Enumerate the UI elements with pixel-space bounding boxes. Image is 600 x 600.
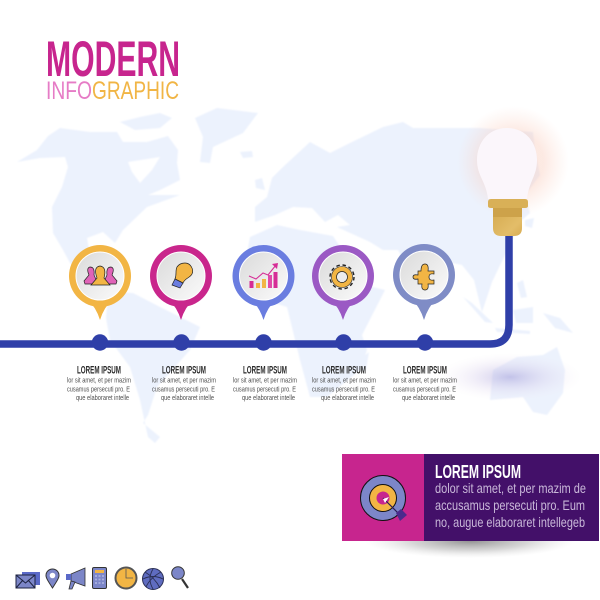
step 3 text: lor sit amet, et per mazim — [233, 376, 297, 384]
timeline dot 4 — [335, 334, 352, 351]
step 4 text: que elaboraret intelle — [321, 393, 374, 402]
icon: megaphone — [66, 568, 85, 589]
timeline dot 1 — [92, 334, 108, 351]
step 2 text: cusamus persecuti pro. E — [152, 384, 215, 394]
step 2 pin — [150, 245, 212, 320]
title: MODERN — [46, 31, 180, 87]
step 5 text — [393, 364, 457, 402]
step 4 pin — [312, 245, 374, 320]
light bulb — [457, 106, 569, 236]
title — [46, 31, 180, 105]
timeline dot 5 — [417, 334, 433, 351]
icon: envelope — [16, 572, 40, 588]
step 5 text: LOREM IPSUM — [403, 364, 447, 376]
icon: bulb — [172, 263, 193, 288]
timeline dot 3 — [255, 334, 272, 351]
step 2 text: que elaboraret intelle — [161, 393, 214, 402]
step 3 text: que elaboraret intelle — [242, 393, 295, 402]
step 4 text: cusamus persecuti pro. E — [312, 384, 375, 394]
step 1 text: lor sit amet, et per mazim — [67, 376, 131, 384]
icon: gear — [330, 265, 354, 289]
step 1 text: cusamus persecuti pro. E — [67, 384, 130, 394]
icon: map pin — [46, 569, 59, 588]
step 5 text: que elaboraret intelle — [402, 393, 455, 402]
step 2 text — [152, 364, 216, 402]
step 3 pin — [232, 245, 294, 320]
icon: target — [360, 476, 407, 521]
timeline line — [0, 232, 509, 344]
title: GRAPHIC — [92, 77, 179, 105]
icon: clock — [116, 568, 136, 588]
step 5 text: lor sit amet, et per mazim — [393, 376, 457, 384]
timeline dot 2 — [173, 334, 190, 351]
step 4 text: LOREM IPSUM — [322, 364, 366, 376]
icon: puzzle piece — [413, 264, 434, 290]
icon: growth chart — [249, 263, 278, 288]
step 4 text: lor sit amet, et per mazim — [312, 376, 376, 384]
step 3 text — [233, 364, 297, 402]
step 3 text: LOREM IPSUM — [243, 364, 287, 376]
icon: magnifier — [172, 567, 188, 588]
icon: people — [84, 266, 117, 285]
background world map — [17, 108, 573, 443]
icon: calculator — [92, 568, 106, 588]
step 3 text: cusamus persecuti pro. E — [233, 384, 296, 394]
callout text — [435, 461, 586, 530]
step 5 text: cusamus persecuti pro. E — [393, 384, 456, 394]
step 4 text — [312, 364, 376, 402]
step 2 text: lor sit amet, et per mazim — [152, 376, 216, 384]
title: INFO — [46, 77, 92, 105]
step 2 text: LOREM IPSUM — [162, 364, 206, 376]
callout text: LOREM IPSUM — [435, 461, 521, 482]
step 5 pin — [393, 244, 455, 320]
step 1 text: LOREM IPSUM — [77, 364, 121, 376]
light bulb floor glow — [438, 353, 582, 401]
step 1 pin — [69, 245, 131, 320]
panel: callout — [342, 454, 599, 558]
step 1 text: que elaboraret intelle — [76, 393, 129, 402]
icon: globe — [142, 568, 164, 590]
step 1 text — [67, 364, 131, 402]
